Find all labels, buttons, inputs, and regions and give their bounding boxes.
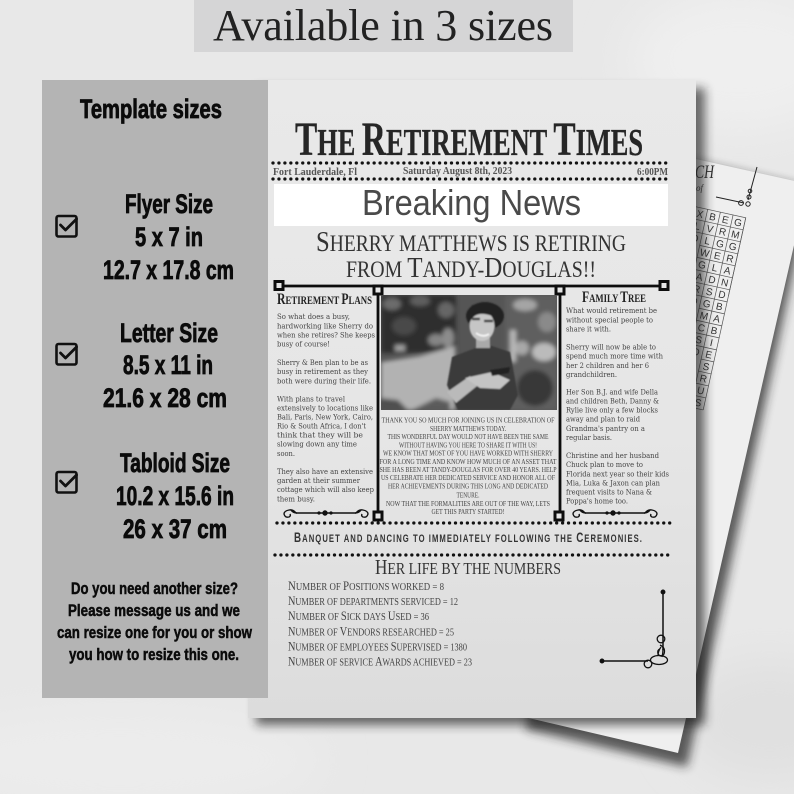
center tribute text: WITHOUT HAVING YOU HERE TO SHARE IT WITH US! (399, 440, 537, 450)
column text: retirement plans: hardworking like Sherry do (277, 321, 373, 330)
word search grid: I (709, 338, 714, 349)
numbers list: NUMBER OF POSITIONS WORKED = 8 (288, 578, 444, 593)
word search grid: A (712, 313, 721, 326)
word search grid: R (692, 284, 701, 296)
column text: family tree: Florida next year so their kids (566, 469, 669, 478)
section heading: her life by the numbers: HER LIFE BY THE NUMBERS (375, 555, 561, 579)
column text: family tree: without special people to (566, 315, 653, 324)
column text: retirement plans: soon. (277, 449, 295, 458)
column text: family tree: Chuck plan to move to (566, 460, 643, 469)
word search grid: S (701, 361, 711, 374)
front page: newspaper (248, 80, 696, 718)
column text: family tree: Her Son B.J. and wife Della (566, 388, 658, 397)
column text: family tree: frequent visits to Nana & (566, 487, 652, 496)
word search grid: V (705, 224, 715, 236)
word search grid: B (715, 301, 724, 314)
column text: family tree: Sherry will now be able to (566, 343, 656, 352)
resize note (57, 580, 252, 664)
word search grid: G (715, 238, 725, 251)
main headline (316, 226, 626, 284)
resize note: you how to resize this one. (69, 646, 239, 664)
column frame (275, 282, 668, 520)
panel heading: Template sizes (80, 94, 222, 124)
word search grid: G (728, 241, 738, 254)
word search grid: A (723, 265, 732, 278)
word search grid: E (704, 349, 713, 362)
flyer size text: Flyer Size (125, 189, 213, 219)
breaking news banner: Breaking News (362, 182, 581, 223)
column text: retirement plans: slowing down any time (277, 440, 357, 449)
column text: retirement plans: busy in retirement as they (277, 367, 369, 376)
column text: family tree: What would retirement be (566, 306, 657, 315)
center tribute text: THANK YOU SO MUCH FOR JOINING US IN CELEBRATION OF (382, 416, 554, 424)
column text: retirement plans: With plans to travel (277, 394, 345, 403)
column text: retirement plans: Rio & South Africa, I don't (277, 422, 367, 431)
center tribute text: FOR A LONG TIME AND KNOW HOW MUCH OF AN ASSET THAT (380, 457, 557, 466)
center tribute text: GET THIS PARTY STARTED! (432, 507, 504, 516)
tabloid size text: Tabloid Size (120, 448, 230, 478)
center tribute text: US CELEBRATE HER DEDICATED SERVICE AND HONOR ALL OF (381, 473, 555, 482)
column text: retirement plans: them busy. (277, 494, 315, 503)
flyer size text: 12.7 x 17.8 cm (103, 255, 234, 285)
column text: retirement plans: garden at their summer (277, 476, 360, 485)
column heading: retirement plans: RETIREMENT PLANS (277, 291, 372, 308)
numbers list (288, 578, 472, 668)
word search grid: U (696, 385, 705, 398)
word search grid: M (699, 310, 709, 323)
word search grid: A (695, 272, 704, 284)
flyer size text (103, 189, 234, 285)
column text: family tree: her 2 children and her 6 (566, 361, 649, 370)
title: available in 3 sizes: Available in 3 sizes (213, 1, 553, 50)
word search grid: X (695, 209, 705, 221)
word search grid: L (711, 263, 719, 275)
column text: family tree: and children Beth, Danny & (566, 397, 659, 406)
word search grid: D (717, 289, 727, 302)
icon: checkbox flyer (56, 216, 76, 236)
column text: family tree: share it with. (566, 324, 611, 333)
numbers list: NUMBER OF SICK DAYS USED = 36 (288, 608, 429, 623)
word search grid: D (707, 274, 717, 287)
column text: retirement plans: They also have an extensive (277, 467, 373, 476)
title band (194, 0, 573, 52)
center tribute text (380, 416, 557, 516)
dateline with dotted rules: 6:00PM (637, 167, 669, 178)
column text: retirement plans: cottage which will also keep (277, 485, 374, 494)
main headline: FROM TANDY-DOUGLAS!! (346, 252, 596, 284)
column text: retirement plans: busy of course! (277, 339, 330, 348)
column text: retirement plans: Bali, Paris, New York, Cairo, (277, 413, 373, 422)
newspaper masthead: THE RETIREMENT TIMES (295, 113, 643, 166)
word search subtitle fragment: of (696, 183, 704, 193)
dateline with dotted rules (273, 163, 669, 179)
resize note: can resize one for you or show (57, 624, 252, 642)
center tribute text: SHERRY MATTHEWS TODAY. (430, 424, 506, 433)
front page shadow (256, 88, 705, 725)
main headline: SHERRY MATTHEWS IS RETIRING (316, 226, 626, 258)
breaking news banner (274, 182, 668, 226)
banquet notice with dotted rules: BANQUET AND DANCING TO IMMEDIATELY FOLLOWING THE CEREMONIES. (294, 529, 643, 545)
numbers list: NUMBER OF VENDORS RESEARCHED = 25 (288, 624, 454, 638)
numbers list: NUMBER OF DEPARTMENTS SERVICED = 12 (288, 593, 458, 608)
letter size text: Letter Size (120, 318, 218, 348)
center tribute text: NOW THAT THE FORMALITIES ARE OUT OF THE WAY, LETS (386, 499, 550, 508)
tabloid size text: 26 x 37 cm (123, 514, 227, 544)
column text: retirement plans: So what does a busy, (277, 312, 350, 321)
letter size text: 21.6 x 28 cm (103, 383, 227, 413)
column text: family tree: grandchildren. (566, 370, 617, 379)
word search grid: M (730, 229, 740, 242)
column text: family tree: Grandma's pantry on a (566, 424, 645, 433)
center tribute text: SHE HAS BEEN AT TANDY-DOUGLAS FOR OVER 40 YEARS. HELP (380, 465, 556, 474)
banquet notice with dotted rules (275, 523, 670, 555)
word search grid: S (694, 335, 703, 347)
center tribute text: WE KNOW THAT MOST OF YOU HAVE WORKED WITH SHERRY (383, 448, 554, 458)
word search grid: R (725, 253, 735, 266)
column heading: family tree: FAMILY TREE (582, 289, 646, 306)
ornament on back page (716, 167, 757, 206)
column text: family tree: Christine and her husband (566, 451, 659, 460)
word search grid: B (708, 212, 717, 224)
column text: retirement plans (277, 312, 375, 503)
word search grid: B (709, 325, 719, 338)
letter size text (103, 318, 227, 413)
resize note: Do you need another size? (71, 580, 238, 598)
word search grid (652, 207, 746, 410)
column text: retirement plans: think that they will be (277, 431, 363, 440)
word search grid: E (713, 251, 722, 263)
column text: retirement plans: extensively to locations like (277, 403, 373, 412)
word search grid: G (697, 260, 707, 272)
back page: word search sheet (520, 151, 794, 767)
flyer size text: 5 x 7 in (135, 222, 203, 252)
numbers list: NUMBER OF EMPLOYEES SUPERVISED = 1380 (288, 638, 467, 654)
word search grid: S (693, 397, 703, 410)
word search grid: G (702, 298, 712, 311)
flourish: right column (573, 510, 657, 517)
word search grid: R (699, 373, 708, 386)
side panel: template sizes (42, 80, 268, 698)
column text: family tree: Mia, Luka & Jaxon can plan (566, 479, 660, 488)
column text: family tree: Poppa's home too. (566, 496, 628, 505)
word search grid: E (721, 215, 730, 227)
word search grid: W (699, 247, 711, 260)
tabloid size text: 10.2 x 15.6 in (116, 481, 234, 511)
dateline with dotted rules: Fort Lauderdale, Fl (273, 167, 357, 178)
icon: checkbox letter (56, 344, 76, 364)
column text: family tree: away and plan to raid (566, 415, 640, 424)
column text: family tree: Rylie live only a few blocks (566, 406, 658, 415)
word search grid: D (691, 347, 701, 359)
word search grid: D (689, 296, 699, 308)
word search grid: R (718, 226, 727, 239)
word search grid: O (689, 233, 700, 245)
center tribute text: HER ACHIEVEMENTS DURING THIS LONG AND DEDICATED (388, 482, 549, 490)
center tribute text: THIS WONDERFUL DAY WOULD NOT HAVE BEEN THE SAME (388, 432, 549, 441)
column text: retirement plans: when she retires? She keeps (277, 330, 375, 339)
photo: retiree smiling with phone (381, 295, 557, 410)
column text: family tree (566, 306, 669, 505)
dateline with dotted rules: Saturday August 8th, 2023 (403, 166, 512, 177)
resize note: Please message us and we (68, 602, 240, 620)
column text: retirement plans: Sherry & Ben plan to be as (277, 358, 368, 367)
column text: retirement plans: both were during their life. (277, 376, 371, 385)
tabloid size text (116, 448, 234, 544)
word search grid: G (733, 217, 743, 230)
icon: checkbox tabloid (56, 472, 76, 492)
column text: family tree: spend much more time with (566, 352, 663, 361)
letter size text: 8.5 x 11 in (123, 350, 213, 380)
word search grid: L (703, 236, 711, 248)
word search heading fragment: CH (695, 162, 715, 183)
flourish: left column (284, 510, 368, 517)
word search grid: S (705, 287, 714, 299)
word search grid: L (693, 221, 701, 233)
corner ornament (600, 590, 668, 668)
word search grid: N (720, 277, 729, 290)
word search grid: C (696, 323, 706, 335)
column text: family tree: regular basis. (566, 433, 612, 442)
numbers list: NUMBER OF SERVICE AWARDS ACHIEVED = 23 (288, 654, 472, 668)
center tribute text: TENURE. (456, 490, 480, 500)
